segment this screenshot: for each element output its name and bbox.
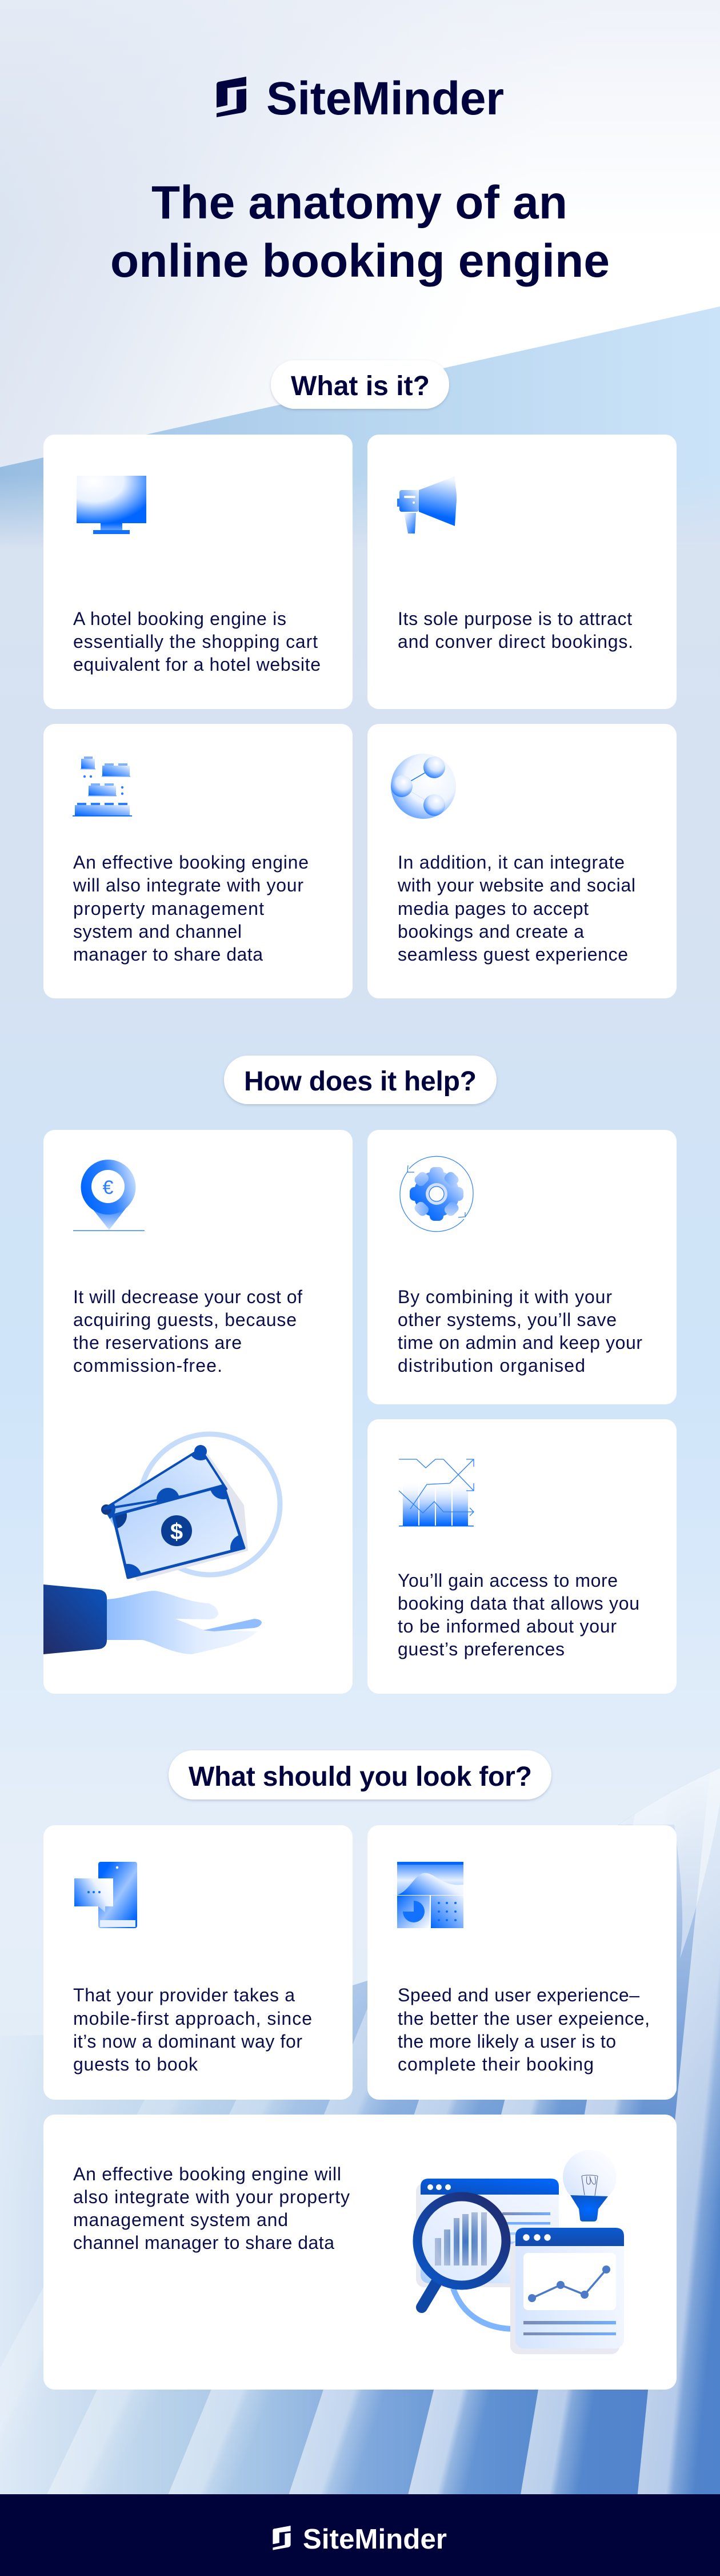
text: integrate with PMS: will also integrate with your: [73, 875, 303, 895]
icon: monitor: [77, 476, 146, 534]
icon: megaphone: [397, 476, 457, 533]
illustration: analytics windows: [416, 2150, 624, 2354]
text: integrate with PMS: system and channel: [73, 921, 242, 942]
text: share data: An effective booking engine will: [73, 2164, 341, 2184]
text: sole purpose: [398, 608, 633, 652]
footer logo mark: [273, 2526, 291, 2550]
panel: mobile-first: [43, 1825, 353, 2100]
text: decrease cost: [73, 1287, 302, 1376]
title: The anatomy of an: [151, 177, 567, 229]
text: share data: also integrate with your property: [73, 2187, 350, 2207]
text: booking data: [398, 1570, 639, 1659]
text: share data: channel manager to share data: [73, 2232, 334, 2253]
text: speed and UX: Speed and user experience–: [398, 1985, 639, 2005]
heading: What should you look for?: What should you look for?: [189, 1762, 532, 1792]
text: combine systems: distribution organised: [398, 1355, 585, 1376]
icon: euro map pin: €: [103, 1177, 114, 1199]
wordmark: SiteMinder: [266, 73, 504, 125]
text: mobile-first: guests to book: [73, 2054, 198, 2075]
text: integrate with PMS: manager to share data: [73, 944, 263, 965]
heading: How does it help?: [224, 1056, 497, 1104]
heading: What is it?: What is it?: [291, 371, 430, 401]
text: website and social: media pages to accept: [398, 898, 589, 919]
text: speed and UX: complete their booking: [398, 2054, 594, 2075]
text: decrease cost: It will decrease your cost of: [73, 1287, 302, 1307]
icon: gear with arrows: [400, 1156, 473, 1232]
text: website and social: [397, 852, 635, 965]
panel: speed and UX: [367, 1825, 677, 2100]
text: booking data: booking data that allows you: [398, 1593, 639, 1614]
text: share data: management system and: [73, 2209, 288, 2230]
icon: magnifying glass: [417, 2197, 506, 2285]
panel: integrate with PMS: [43, 724, 353, 998]
heading: What is it?: [271, 360, 449, 409]
text: website and social: In addition, it can integrate: [398, 852, 625, 873]
text: shopping cart: equivalent for a hotel website: [73, 654, 321, 675]
logo mark: [217, 77, 246, 117]
panel: booking data: [367, 1419, 677, 1694]
icon: network sphere: [391, 754, 456, 819]
text: decrease cost: commission-free.: [73, 1355, 222, 1376]
panel: sole purpose: [367, 435, 677, 709]
text: mobile-first: [73, 1985, 312, 2075]
text: sole purpose: and conver direct bookings.: [398, 631, 633, 652]
text: speed and UX: [398, 1985, 650, 2075]
panel: website and social integration: [367, 724, 677, 998]
icon: euro map pin: [73, 1160, 145, 1231]
text: decrease cost: acquiring guests, because: [73, 1309, 297, 1330]
text: speed and UX: the more likely a user is to: [398, 2031, 616, 2052]
icon: dashboard: [397, 1862, 463, 1928]
text: integrate with PMS: [73, 852, 309, 965]
logo: SiteMinder header: [217, 73, 504, 125]
text: website and social: seamless guest experience: [398, 944, 628, 965]
footer wordmark: SiteMinder: [303, 2524, 447, 2555]
text: booking data: to be informed about your: [398, 1616, 617, 1637]
text: shopping cart: [73, 608, 321, 675]
text: combine systems: other systems, you’ll save: [398, 1309, 617, 1330]
text: integrate with PMS: An effective booking engine: [73, 852, 309, 873]
text: sole purpose: Its sole purpose is to attract: [398, 608, 632, 629]
text: booking data: You’ll gain access to more: [398, 1570, 618, 1591]
heading: How does it help?: How does it help?: [244, 1066, 477, 1097]
text: mobile-first: it’s now a dominant way for: [73, 2031, 302, 2052]
footer: [0, 2494, 720, 2576]
panel: combine systems: [367, 1130, 677, 1404]
heading: What should you look for?: [169, 1750, 551, 1799]
icon: phone with chat bubble: [74, 1862, 137, 1928]
text: website and social: bookings and create a: [398, 921, 584, 942]
text: decrease cost: the reservations are: [73, 1332, 242, 1353]
text: combine systems: [398, 1287, 642, 1376]
icon: trend chart: [399, 1459, 474, 1527]
text: mobile-first: mobile-first approach, since: [73, 2008, 312, 2029]
line chart: [528, 2266, 610, 2302]
text: shopping cart: essentially the shopping cart: [73, 631, 318, 652]
text: shopping cart: A hotel booking engine is: [73, 608, 286, 629]
text: integrate with PMS: property management: [73, 898, 264, 919]
text: speed and UX: the better the user expeience,: [398, 2008, 650, 2029]
panel: decrease cost: [43, 1130, 353, 1694]
illustration: hand holding money: $: [170, 1519, 183, 1544]
title: online booking engine: [110, 235, 610, 287]
text: share data: [73, 2164, 350, 2253]
illustration: hand holding money: [43, 1434, 280, 1654]
panel: integrate and share data: [43, 2115, 677, 2390]
text: booking data: guest’s preferences: [398, 1639, 565, 1659]
icon: building bricks: [73, 757, 132, 817]
text: combine systems: time on admin and keep your: [398, 1332, 642, 1353]
icon: light bulb: [563, 2150, 617, 2221]
text: combine systems: By combining it with your: [398, 1287, 612, 1307]
text: mobile-first: That your provider takes a: [73, 1985, 295, 2005]
panel: shopping cart equivalent: [43, 435, 353, 709]
text: website and social: with your website and social: [397, 875, 635, 895]
title: [110, 177, 610, 287]
